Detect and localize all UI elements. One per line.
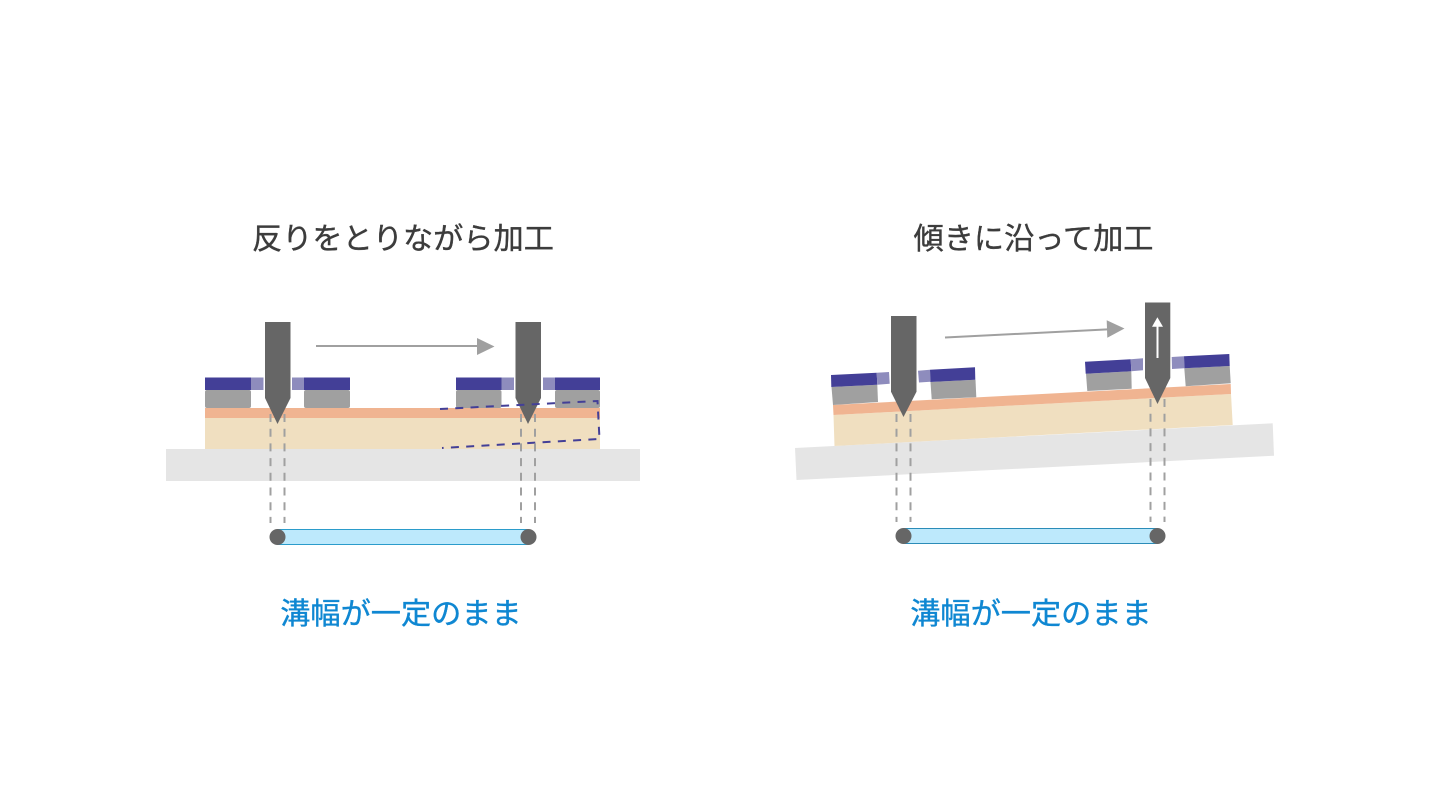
chips: left group bbox=[205, 378, 350, 408]
caption: left: 溝幅が一定のまま bbox=[280, 597, 522, 631]
groove width bar bbox=[896, 528, 1166, 544]
stage: right bbox=[795, 423, 1274, 480]
orange layer: left bbox=[205, 408, 600, 418]
chips: tilted right group bbox=[1085, 354, 1231, 391]
blade: end bbox=[516, 322, 541, 424]
arrow: travel along tilt bbox=[945, 320, 1124, 338]
panel: processing along the tilt bbox=[795, 222, 1274, 631]
orange layer: right bbox=[833, 384, 1231, 415]
projection lines bbox=[270, 414, 535, 523]
caption: right: 溝幅が一定のまま bbox=[910, 597, 1152, 631]
blade: start bbox=[891, 316, 916, 417]
substrate: right bbox=[834, 394, 1233, 446]
groove width bar bbox=[270, 529, 536, 545]
blade: end, raised bbox=[1145, 302, 1170, 404]
warp outline: dashed bbox=[440, 401, 600, 448]
chips: tilted left group bbox=[831, 367, 976, 405]
stage: left bbox=[166, 449, 640, 481]
chips: right group bbox=[456, 378, 600, 408]
heading: left: 反りをとりながら加工 bbox=[252, 222, 554, 256]
blade: start bbox=[265, 322, 290, 424]
arrow: travel direction bbox=[316, 338, 494, 355]
panel: processing while correcting warp bbox=[166, 222, 640, 631]
arrow: raise blade bbox=[1152, 317, 1163, 358]
heading: right: 傾きに沿って加工 bbox=[914, 222, 1154, 256]
projection lines bbox=[896, 399, 1164, 522]
substrate: left bbox=[205, 418, 600, 449]
